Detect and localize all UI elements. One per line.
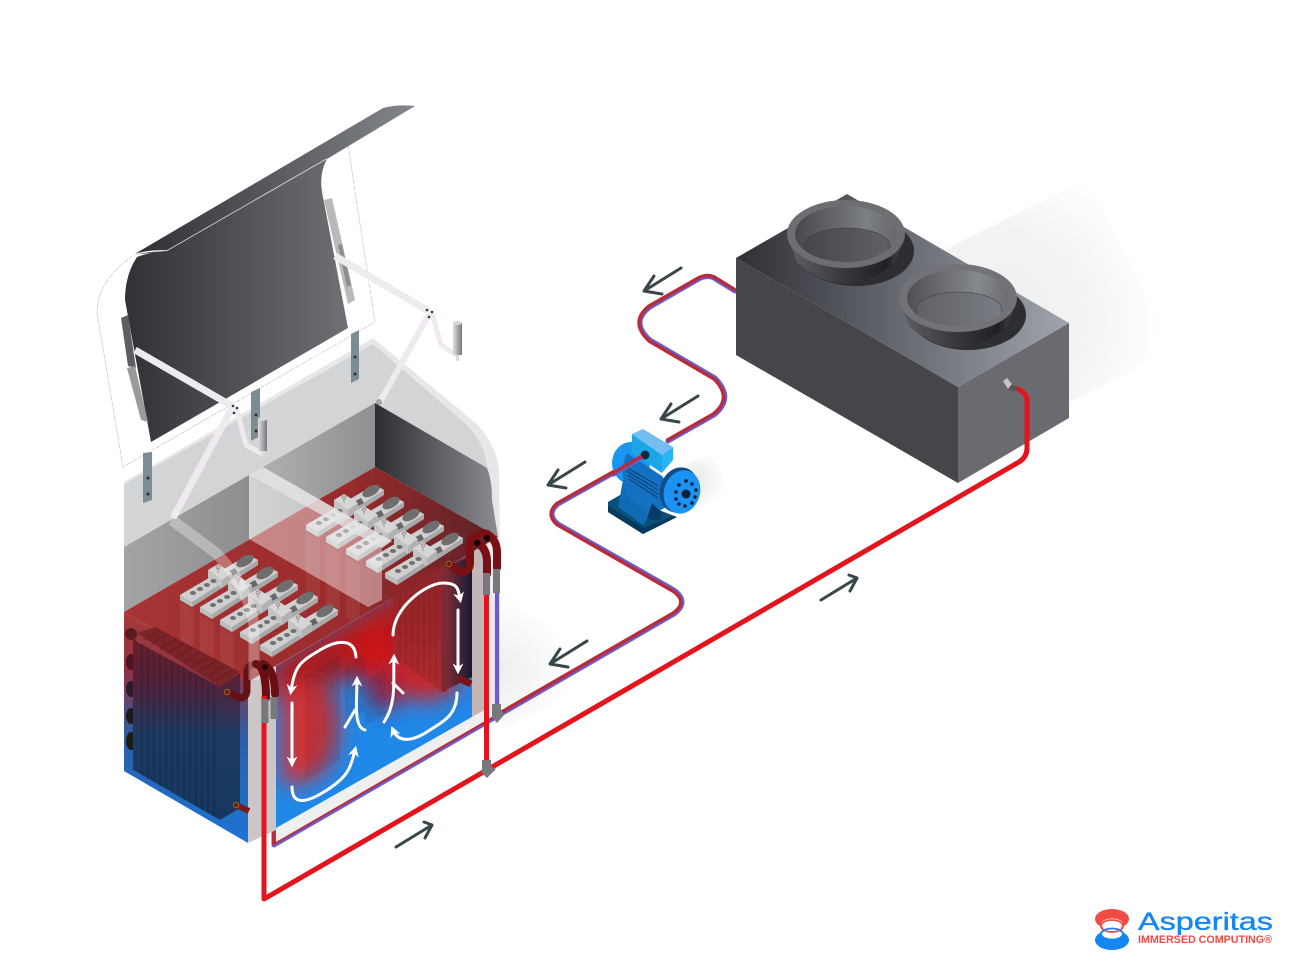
pipe: purple return loop between tank and dry cooler	[274, 276, 735, 845]
tank pipework inside left	[256, 664, 275, 698]
right radiator	[393, 556, 472, 692]
connectors and valves	[262, 569, 505, 778]
liquid surface	[124, 467, 498, 682]
pipe: red riser to tank	[484, 590, 489, 771]
lid hinge plate right	[324, 198, 355, 304]
radiator face	[133, 636, 220, 820]
mount brackets	[143, 330, 359, 503]
tank right post	[472, 544, 487, 717]
translucent front wall panel	[249, 475, 382, 607]
lid white edge	[133, 159, 327, 255]
flow arrows left loop	[291, 642, 365, 800]
tank lid	[97, 105, 415, 467]
shadow: dry cooler	[945, 178, 1175, 402]
gas piston left	[258, 417, 267, 457]
pump	[608, 429, 706, 534]
arrow 5	[821, 575, 857, 600]
tank rim surface	[124, 338, 500, 547]
logo: Asperitas	[1095, 908, 1273, 950]
left radiator	[125, 627, 253, 820]
dry cooler	[736, 194, 1069, 483]
coolant stub upper	[227, 664, 253, 698]
back wall left	[124, 475, 249, 612]
shadow: pump	[686, 452, 730, 510]
flow arrow spurs	[345, 683, 403, 727]
fan shroud rear	[787, 200, 914, 286]
fan shroud front	[899, 264, 1026, 350]
tank lower lip	[276, 704, 497, 842]
pump foot gap	[647, 503, 662, 520]
cooler top face	[736, 194, 1069, 387]
right radiator lower stub	[458, 678, 471, 684]
pump rear disc	[612, 442, 650, 484]
pump terminal box	[632, 434, 662, 473]
tank left corner post	[248, 666, 276, 843]
lid support arms	[135, 256, 458, 518]
tank front left face	[124, 612, 248, 843]
pump legs	[618, 480, 648, 525]
tank rim inner	[124, 344, 487, 547]
logo wordmark: Asperitas	[1138, 908, 1273, 936]
lid top strip	[133, 105, 415, 255]
pipe end rings right	[474, 535, 490, 546]
flow arrows right loop	[384, 583, 460, 739]
cooler supply pipe overlay	[1016, 388, 1027, 462]
lid hinge plate left	[121, 315, 136, 368]
arrow 1	[644, 268, 681, 294]
shadow: immersion tank	[498, 590, 580, 730]
arrow 4	[550, 641, 587, 667]
cooler pipe connector	[1003, 378, 1018, 392]
radiator rear coils	[125, 628, 137, 750]
radiator top fins	[137, 627, 240, 687]
arrow 2	[661, 396, 698, 422]
pump front disc	[654, 462, 704, 518]
radiator side	[442, 556, 472, 692]
lid outline	[97, 145, 375, 467]
coolant stub lower	[236, 805, 249, 811]
radiator side	[220, 673, 240, 820]
immersion tank	[124, 338, 500, 843]
translucent wall curve	[172, 520, 254, 680]
back wall dark	[375, 403, 498, 537]
arrow 6	[396, 822, 432, 847]
back wall mid	[249, 403, 375, 540]
immersed server silhouettes	[305, 655, 385, 780]
immersed blade shadows	[180, 532, 360, 695]
pump inlet	[640, 450, 650, 460]
pump fan ring	[674, 479, 698, 508]
translucent front wall band	[249, 467, 392, 548]
pump base	[608, 495, 677, 534]
lid inner panel	[125, 159, 348, 442]
pipe end ring left	[262, 664, 268, 670]
tank pipework inside right	[450, 533, 497, 574]
cooler right face	[958, 323, 1069, 483]
server blades group rear	[306, 482, 463, 585]
arrow 3	[548, 462, 585, 488]
direction arrows	[396, 268, 857, 847]
radiator fins	[142, 644, 214, 816]
tank right outer strip	[487, 540, 494, 710]
server blades group front	[180, 552, 338, 657]
pipe: red supply loop	[264, 388, 1027, 899]
pipe: purple riser to tank	[495, 590, 499, 716]
cooler left face	[736, 258, 958, 483]
pump body	[622, 453, 672, 516]
tank front right face with thermal gradient	[276, 556, 472, 828]
radiator fins	[393, 563, 447, 692]
gas piston right	[453, 321, 462, 361]
logo icon	[1095, 909, 1129, 950]
logo tagline: IMMERSED COMPUTING®	[1138, 934, 1272, 946]
